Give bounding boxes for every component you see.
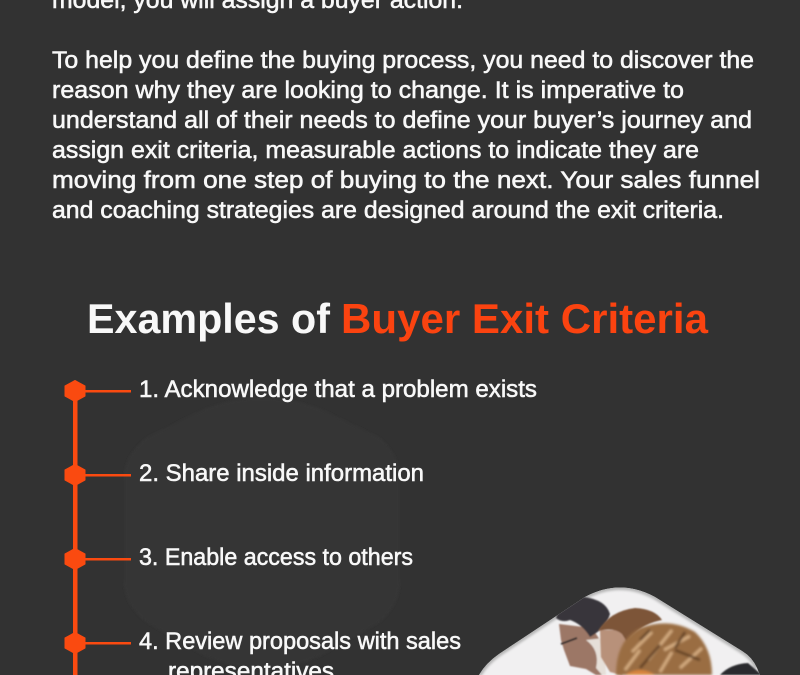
person 1	[556, 597, 610, 675]
criteria list: 1. Acknowledge that a problem exists	[139, 376, 537, 403]
body text block: To help you define the buying process, you need to discover the	[52, 47, 754, 74]
heading: Buyer Exit Criteria	[341, 295, 709, 342]
body text block	[52, 0, 760, 224]
person 2	[598, 608, 662, 675]
step marker 3	[65, 548, 131, 570]
body text block: and coaching strategies are designed around the exit criteria.	[52, 197, 724, 224]
person 3	[616, 623, 712, 675]
body text block: understand all of their needs to define your buyer’s journey and	[52, 107, 752, 134]
heading	[87, 295, 709, 342]
step marker 2	[65, 464, 131, 486]
criteria list: 2. Share inside information	[139, 460, 424, 487]
step marker 4	[65, 632, 131, 654]
body text block: assign exit criteria, measurable actions to indicate they are	[52, 137, 699, 164]
faint background shape	[125, 399, 399, 668]
step marker 1	[65, 380, 131, 402]
timeline	[65, 380, 131, 675]
criteria list: 4. Review proposals with sales	[139, 628, 461, 655]
body text block: reason why they are looking to change. It is imperative to	[52, 77, 684, 104]
criteria list: 3. Enable access to others	[139, 544, 413, 571]
body text block: moving from one step of buying to the next. Your sales funnel	[52, 167, 760, 194]
heading: Examples of	[87, 295, 331, 342]
person 4	[720, 663, 762, 675]
photo: team looking down	[479, 588, 760, 675]
criteria list	[139, 376, 537, 675]
